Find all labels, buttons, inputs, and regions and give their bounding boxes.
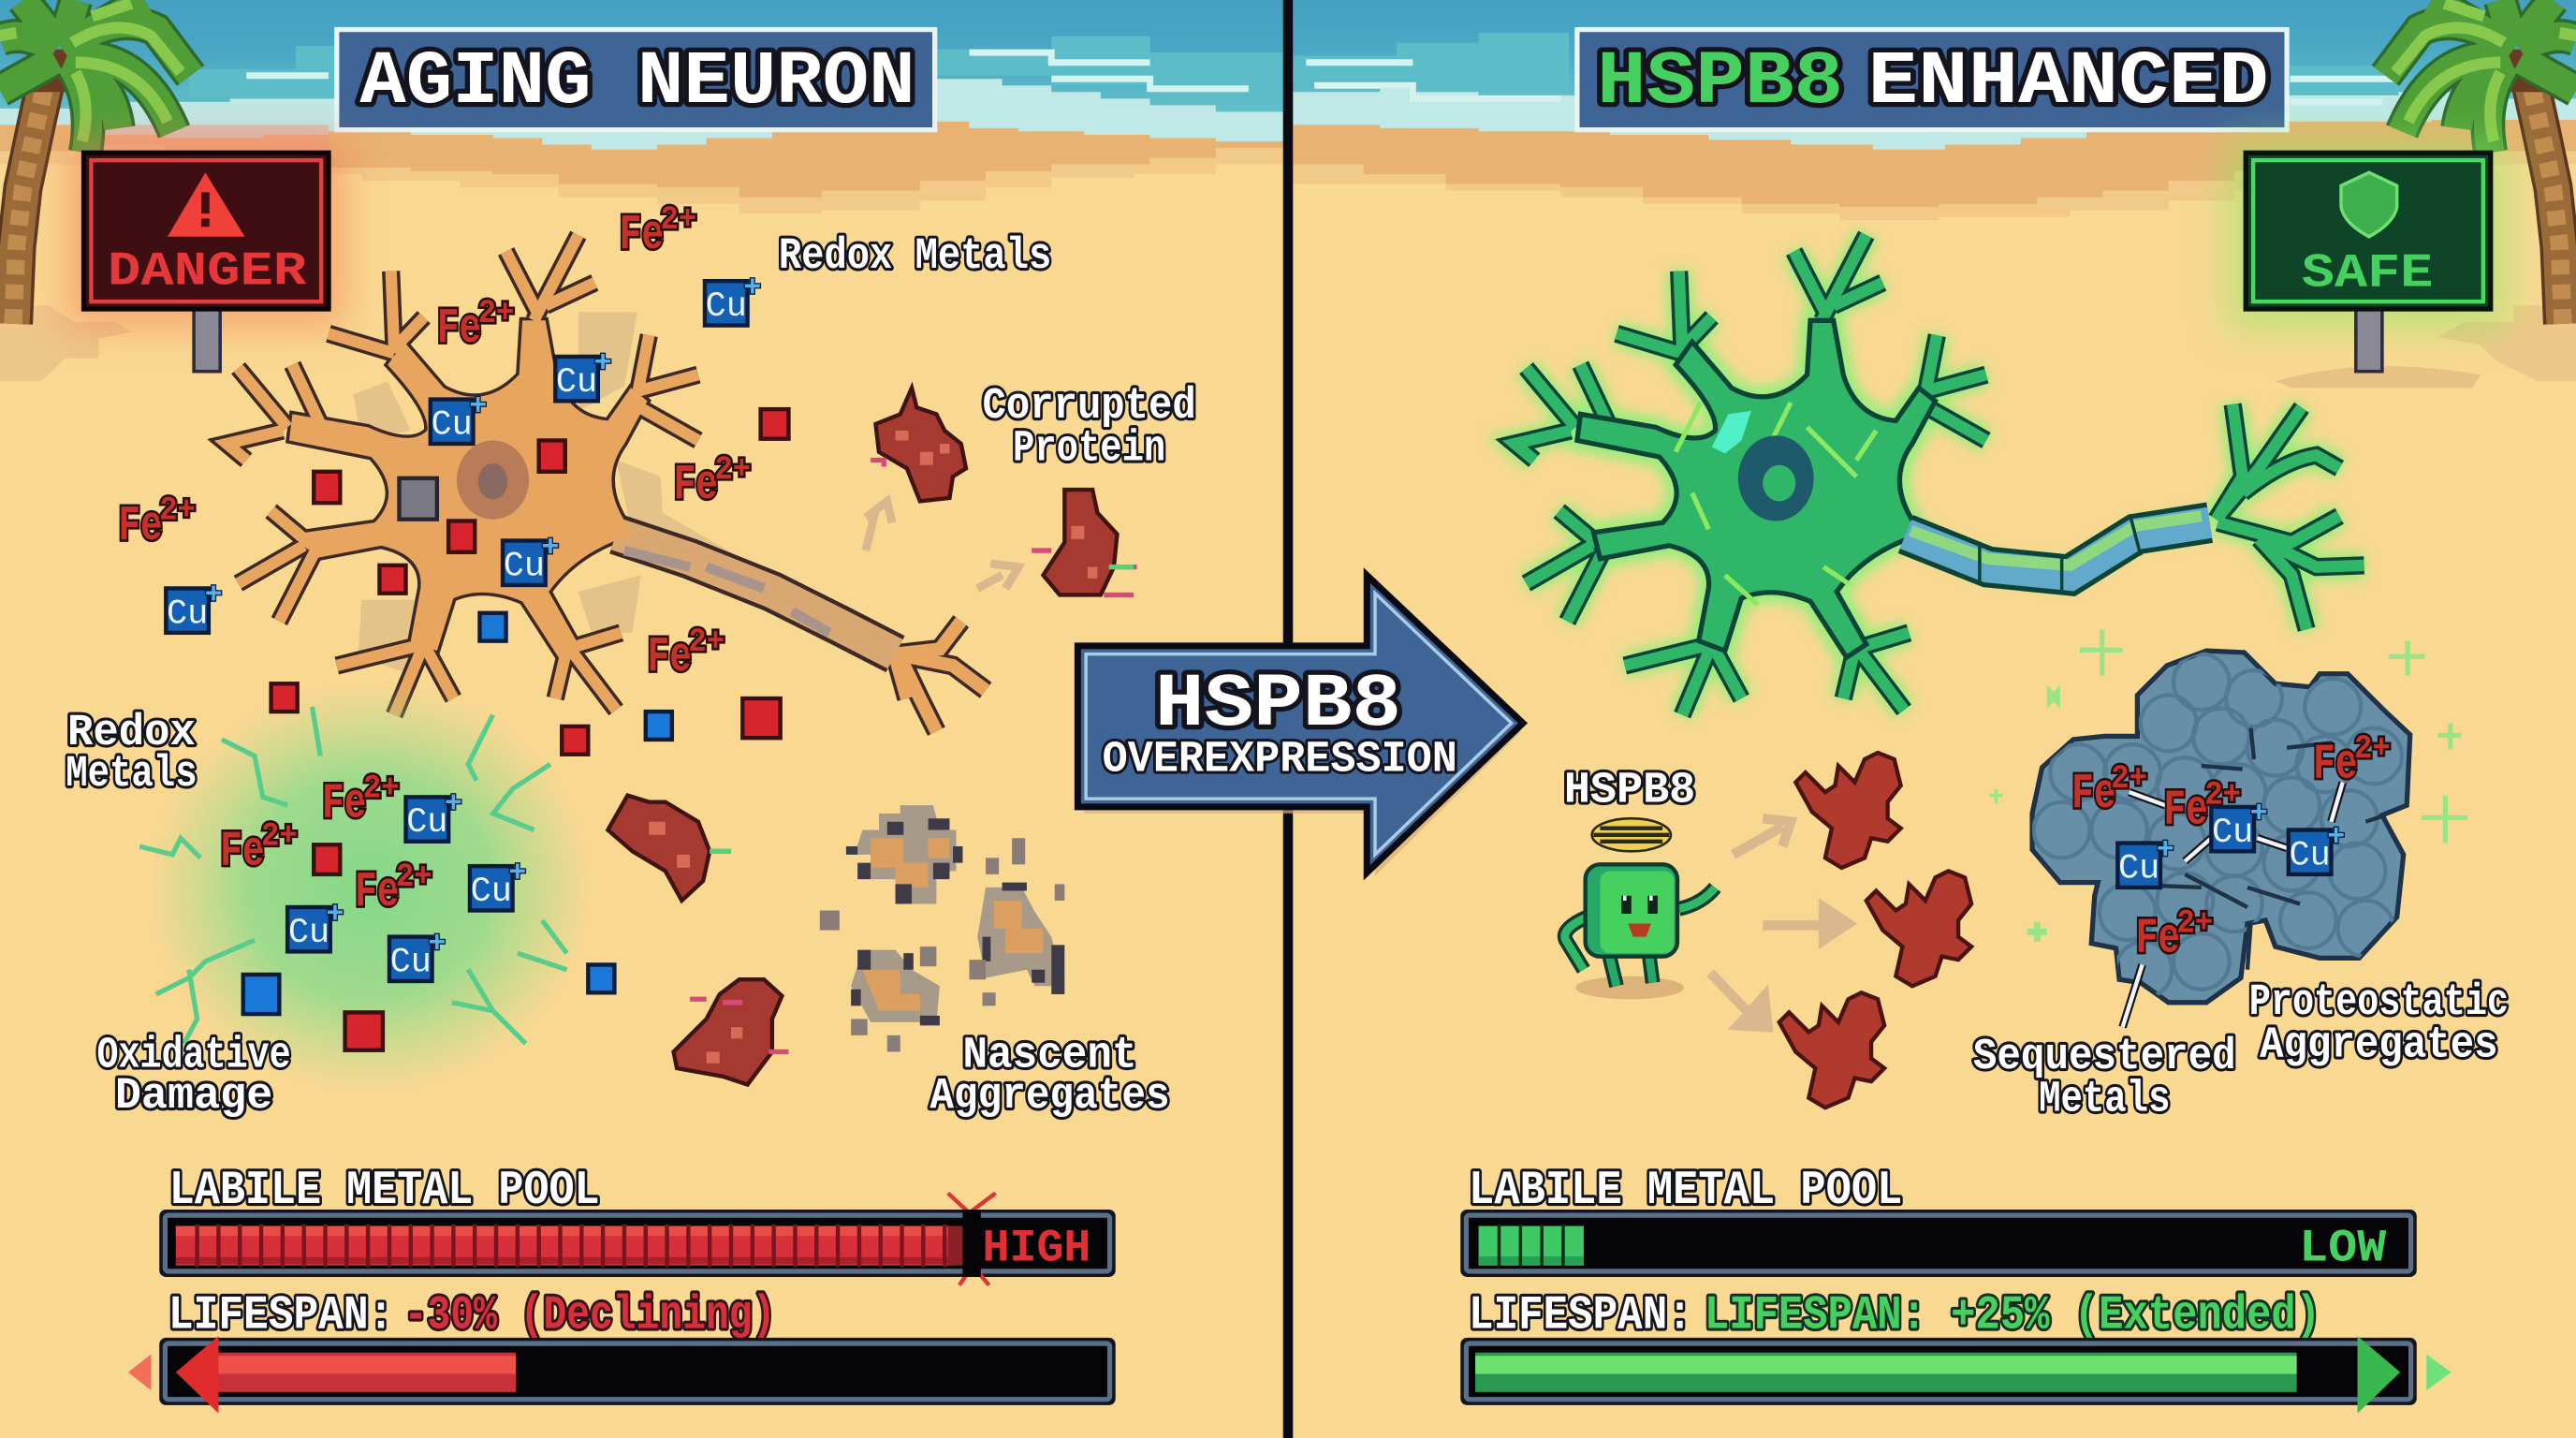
meter: lifespan declining — [128, 1289, 1116, 1414]
background: ocean and shoreline — [0, 0, 2576, 220]
label: corrupted protein: Protein — [1013, 425, 1165, 475]
sea right — [1293, 0, 2576, 98]
ion: Cu+: + — [594, 348, 612, 381]
ion: Cu+ — [2211, 799, 2268, 853]
ion: Cu+ — [503, 532, 559, 586]
ion: Fe2+: 2+ — [2204, 776, 2241, 814]
ion: Cu+: Cu — [167, 594, 208, 634]
ion: Fe2+: Fe — [118, 498, 163, 554]
label: hspb8: HSPB8 — [1564, 767, 1695, 816]
ion: Cu+: Cu — [288, 914, 329, 953]
ion: Fe2+: Fe — [2071, 766, 2116, 822]
ion: Fe2+ — [648, 624, 724, 685]
panel title: hspb8 enhanced — [1577, 30, 2287, 130]
oxidative damage cloud — [139, 682, 592, 1093]
meter: lifespan extended: LIFESPAN: +25% (Extended) — [1705, 1289, 2320, 1343]
ion: Fe2+: Fe — [355, 864, 399, 920]
ion: Cu+ — [389, 928, 446, 982]
ion: Cu+: Cu — [2212, 814, 2253, 853]
ion: Cu+: + — [2250, 799, 2268, 831]
label: redox metals top: Redox Metals — [779, 232, 1051, 282]
ion: Fe2+ — [2313, 730, 2391, 792]
ion: Fe2+: 2+ — [2177, 904, 2213, 942]
sparkles — [1989, 629, 2467, 942]
ion: Fe2+: 2+ — [396, 858, 432, 896]
ion: Cu+: + — [743, 272, 761, 305]
ion: Cu+: + — [327, 899, 344, 932]
label: redox metals left: Metals — [66, 750, 198, 800]
nascent aggregates — [820, 805, 1064, 1051]
label: sequestered metals: Metals — [2039, 1076, 2170, 1125]
hspb8 character — [1564, 767, 1715, 999]
palm shadow left — [0, 306, 131, 381]
icon: small right arrow — [2426, 1354, 2452, 1390]
light wet sand right — [1293, 0, 2576, 220]
panel title: aging neuron: AGING NEURON — [359, 40, 915, 125]
arrow: hspb8 overexpression: HSPB8 — [1155, 663, 1401, 748]
ion: Cu+ — [431, 390, 487, 445]
meter: labile metal pool low: LOW — [2299, 1222, 2387, 1274]
ion: Fe2+: Fe — [2136, 910, 2180, 966]
safe sign — [2228, 139, 2507, 388]
ion: Cu+: + — [445, 788, 462, 821]
sequestered metals — [2071, 730, 2391, 1027]
light wet sand left — [0, 0, 1284, 213]
label: sequestered metals — [1973, 1033, 2236, 1125]
ion: Cu+ — [2289, 821, 2345, 875]
ion: Fe2+: Fe — [620, 207, 664, 263]
meter: labile metal pool high — [159, 1165, 1116, 1285]
wet sand left — [0, 0, 1284, 198]
ion: Fe2+: Fe — [322, 775, 366, 831]
ion: Fe2+ — [2136, 904, 2213, 966]
ion: Fe2+ — [620, 201, 696, 263]
ion: Cu+: + — [2327, 821, 2345, 854]
ion: Fe2+: Fe — [2313, 736, 2358, 792]
corrupted proteins: left panel — [607, 388, 1137, 1085]
arms — [1565, 888, 1715, 970]
label: oxidative damage: Oxidative — [97, 1031, 291, 1080]
vertical panel divider — [1283, 0, 1293, 1438]
label: redox metals left — [66, 709, 198, 800]
ion: Fe2+: 2+ — [688, 624, 724, 661]
meter: labile metal pool high: HIGH — [983, 1222, 1090, 1274]
refolded proteins — [1779, 753, 1971, 1108]
label: corrupted protein — [983, 382, 1196, 475]
connector lines — [2130, 783, 2343, 861]
ion: Cu+: Cu — [471, 873, 512, 912]
metal ions: left panel — [118, 201, 761, 982]
label: proteostatic aggregates: Proteostatic — [2249, 978, 2509, 1028]
label: oxidative damage — [97, 1031, 291, 1122]
palm tree right — [2385, 0, 2576, 324]
palm shadow right — [2438, 306, 2576, 381]
ion: Cu+ — [555, 348, 612, 403]
ion: Fe2+: Fe — [2163, 782, 2208, 838]
ion: Cu+: + — [205, 580, 223, 612]
ion: Fe2+ — [437, 295, 514, 357]
nucleus — [1738, 435, 1814, 521]
crack marks — [948, 1193, 996, 1285]
ion: Fe2+ — [2163, 776, 2241, 838]
ion: Cu+ — [406, 788, 462, 843]
foam left — [0, 0, 1284, 150]
meter: labile metal pool high: LABILE METAL POOL — [169, 1165, 600, 1218]
ion: Fe2+: 2+ — [2111, 760, 2147, 798]
ion: Fe2+: Fe — [437, 301, 481, 357]
arrows: hspb8 to refolded proteins — [1710, 818, 1848, 1027]
ion: Fe2+: 2+ — [261, 817, 298, 855]
ion: Fe2+: Fe — [220, 823, 265, 879]
label: sequestered metals: Sequestered — [1973, 1033, 2236, 1082]
safe sign: SAFE — [2302, 247, 2433, 301]
label: nascent aggregates: Nascent — [962, 1031, 1137, 1080]
ion: Cu+: Cu — [556, 363, 597, 403]
foam right — [1293, 0, 2576, 150]
danger sign: DANGER — [108, 246, 307, 300]
ion: Cu+: Cu — [504, 547, 545, 586]
ion: Fe2+: 2+ — [661, 201, 696, 239]
ion: Cu+: + — [428, 928, 446, 961]
ion: Cu+: + — [2157, 834, 2174, 867]
ion: Cu+: Cu — [406, 803, 447, 843]
sea left — [0, 0, 1284, 111]
pointer line — [2123, 964, 2143, 1027]
arrow: hspb8 overexpression — [1077, 575, 1523, 876]
meter: lifespan declining: LIFESPAN: — [168, 1289, 393, 1343]
ion: Cu+: Cu — [706, 287, 747, 327]
ion: Cu+ — [287, 899, 344, 953]
ion: Fe2+: 2+ — [2354, 730, 2391, 768]
ion: Cu+ — [2117, 834, 2174, 888]
label: nascent aggregates — [929, 1031, 1170, 1122]
ion: Cu+ — [470, 858, 526, 912]
nucleus — [457, 440, 529, 520]
wet sand right — [1293, 0, 2576, 207]
panel title: hspb8 enhanced: HSPB8 — [1597, 40, 1843, 125]
meter: labile metal pool low: LABILE METAL POOL — [1469, 1165, 1902, 1218]
ion: Fe2+ — [355, 858, 432, 920]
wave bands — [189, 33, 2398, 102]
aging neuron — [227, 235, 986, 731]
ion: Cu+ — [166, 580, 223, 634]
hspb8 enhanced neuron — [1515, 235, 2364, 715]
ion: Fe2+ — [220, 817, 298, 879]
icon: right arrow — [2358, 1336, 2400, 1414]
ion: Cu+: Cu — [432, 405, 473, 445]
halo — [1592, 818, 1671, 851]
ion: Cu+ — [705, 272, 761, 327]
ion: Fe2+ — [118, 492, 196, 554]
proteostatic aggregate — [2032, 651, 2410, 1003]
label: proteostatic aggregates: Aggregates — [2260, 1021, 2498, 1071]
meter: labile metal pool low — [1460, 1165, 2417, 1277]
ion: Fe2+: 2+ — [714, 451, 751, 489]
danger sign — [66, 139, 345, 372]
ion: Fe2+: 2+ — [159, 492, 196, 530]
ion: Fe2+: 2+ — [363, 770, 399, 807]
icon: left arrow — [176, 1336, 218, 1414]
palm tree left — [0, 0, 191, 324]
red and blue metal squares — [243, 409, 788, 1050]
danger glow tint on shoreline — [98, 125, 329, 151]
icon: shield — [2341, 172, 2397, 237]
ion: Cu+: + — [541, 532, 559, 565]
label: nascent aggregates: Aggregates — [929, 1072, 1170, 1122]
label: oxidative damage: Damage — [115, 1072, 272, 1122]
meter: lifespan extended — [1460, 1289, 2452, 1414]
myelinated axon — [1906, 516, 2210, 594]
label: proteostatic aggregates — [2249, 978, 2509, 1071]
ion: Cu+: Cu — [390, 943, 432, 982]
panel title: hspb8 enhanced: ENHANCED — [1868, 40, 2269, 125]
icon: warning triangle — [168, 172, 245, 237]
meter: lifespan declining: -30% (Declining) — [404, 1289, 775, 1343]
meter: lifespan extended: LIFESPAN: — [1469, 1289, 1692, 1343]
ion: Cu+: Cu — [2118, 849, 2159, 888]
ion: Fe2+ — [322, 770, 399, 831]
ion: Fe2+: 2+ — [478, 295, 514, 332]
ion: Fe2+ — [674, 451, 751, 513]
ion: Fe2+: Fe — [674, 457, 718, 513]
ion: Cu+: + — [469, 390, 487, 423]
arrows: faint tan arrows — [866, 501, 1018, 588]
arrow: hspb8 overexpression: OVEREXPRESSION — [1103, 735, 1457, 785]
icon: small left arrow — [128, 1354, 151, 1390]
highlight — [1712, 411, 1751, 453]
ion: Cu+: Cu — [2290, 836, 2331, 875]
ion: Fe2+: Fe — [648, 629, 692, 685]
label: corrupted protein: Corrupted — [983, 382, 1196, 432]
shadow patches — [353, 313, 755, 674]
label: redox metals left: Redox — [67, 709, 196, 758]
ion: Cu+: + — [508, 858, 526, 890]
